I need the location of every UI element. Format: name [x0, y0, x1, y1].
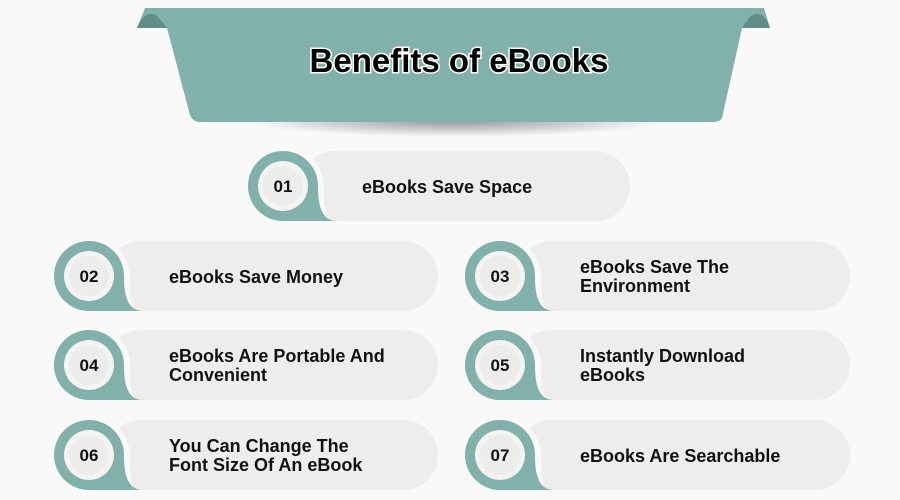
item 02: eBooks Save Money [169, 267, 343, 287]
item 03: eBooks Save The [580, 257, 729, 277]
title: Benefits of eBooks [310, 42, 608, 79]
item 06: Font Size Of An eBook [169, 455, 363, 475]
item 05: 05 [491, 356, 509, 375]
item 04: eBooks Are Portable And [169, 346, 385, 366]
item 05 [460, 325, 850, 405]
item 03 [460, 236, 850, 316]
item 06: 06 [80, 446, 98, 465]
item 02: 02 [80, 267, 98, 286]
item 04 [49, 325, 438, 405]
item 06 [49, 415, 438, 495]
title banner [137, 8, 770, 137]
item 02 [49, 236, 438, 316]
item 03: 03 [491, 267, 509, 286]
item 06: You Can Change The [169, 436, 349, 456]
item 04: 04 [80, 356, 99, 375]
item 07 [460, 415, 850, 495]
item 01: 01 [274, 177, 292, 196]
item 01: eBooks Save Space [362, 177, 532, 197]
item 04: Convenient [169, 365, 267, 385]
item 01 [243, 146, 630, 226]
item 07: eBooks Are Searchable [580, 446, 780, 466]
item 03: Environment [580, 276, 690, 296]
item 07: 07 [491, 446, 509, 465]
item 05: Instantly Download [580, 346, 745, 366]
item 05: eBooks [580, 365, 645, 385]
